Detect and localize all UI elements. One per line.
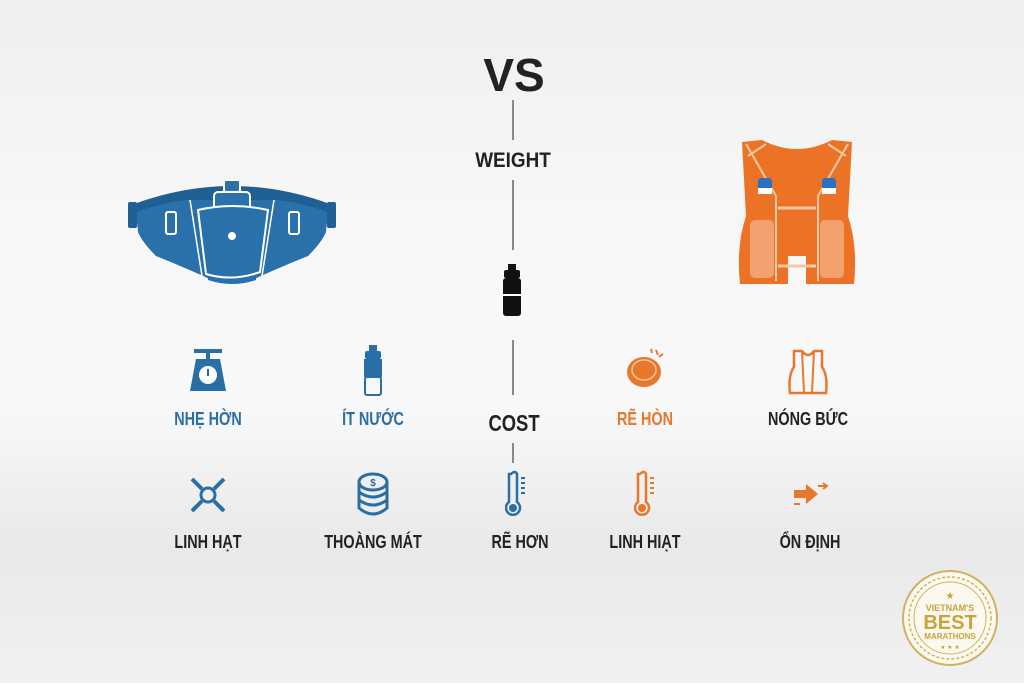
label: thoang mat: THOÀNG MÁT xyxy=(324,532,422,552)
icon: coin xyxy=(627,348,664,387)
label: it nuoc: ÍT NƯỚC xyxy=(342,409,404,429)
illustration: hydration vest xyxy=(738,140,856,284)
icon: coin stack xyxy=(358,472,388,516)
icon: scale xyxy=(190,349,226,391)
icon: center bottle xyxy=(503,264,521,316)
icon: bottle blue xyxy=(364,345,382,396)
icon: cross connector xyxy=(190,478,226,512)
icon: arrows xyxy=(794,482,828,505)
badge: vietnam's best marathons: VIETNAM'S xyxy=(926,603,974,613)
badge: vietnam's best marathons xyxy=(902,570,998,666)
title VS: VS xyxy=(483,49,545,101)
badge: vietnam's best marathons: ★ ★ ★ xyxy=(940,644,960,651)
badge: vietnam's best marathons: MARATHONS xyxy=(924,632,976,641)
icon: thermometer orange xyxy=(634,470,654,516)
icon: thermometer blue xyxy=(505,470,525,516)
heading: cost: COST xyxy=(488,410,540,436)
label: linh hiat: LINH HIẠT xyxy=(609,532,681,552)
badge: vietnam's best marathons: ★ xyxy=(946,591,955,602)
heading: weight: WEIGHT xyxy=(475,149,551,172)
label: linh hat: LINH HẠT xyxy=(174,532,242,552)
label: re hon orange: RẼ HÒN xyxy=(617,409,673,429)
icon: coin stack: $ xyxy=(370,478,376,489)
icon: vest outline xyxy=(788,350,828,394)
label: re hon: RẼ HƠN xyxy=(491,532,549,552)
label: on dinh: ỔN ĐỊNH xyxy=(780,532,840,552)
illustration: waist belt xyxy=(128,179,336,284)
badge: vietnam's best marathons: BEST xyxy=(923,612,977,634)
label: nhe hon: NHẸ HỜN xyxy=(174,409,242,429)
label: nong buc: NÓNG BỨC xyxy=(768,409,848,429)
